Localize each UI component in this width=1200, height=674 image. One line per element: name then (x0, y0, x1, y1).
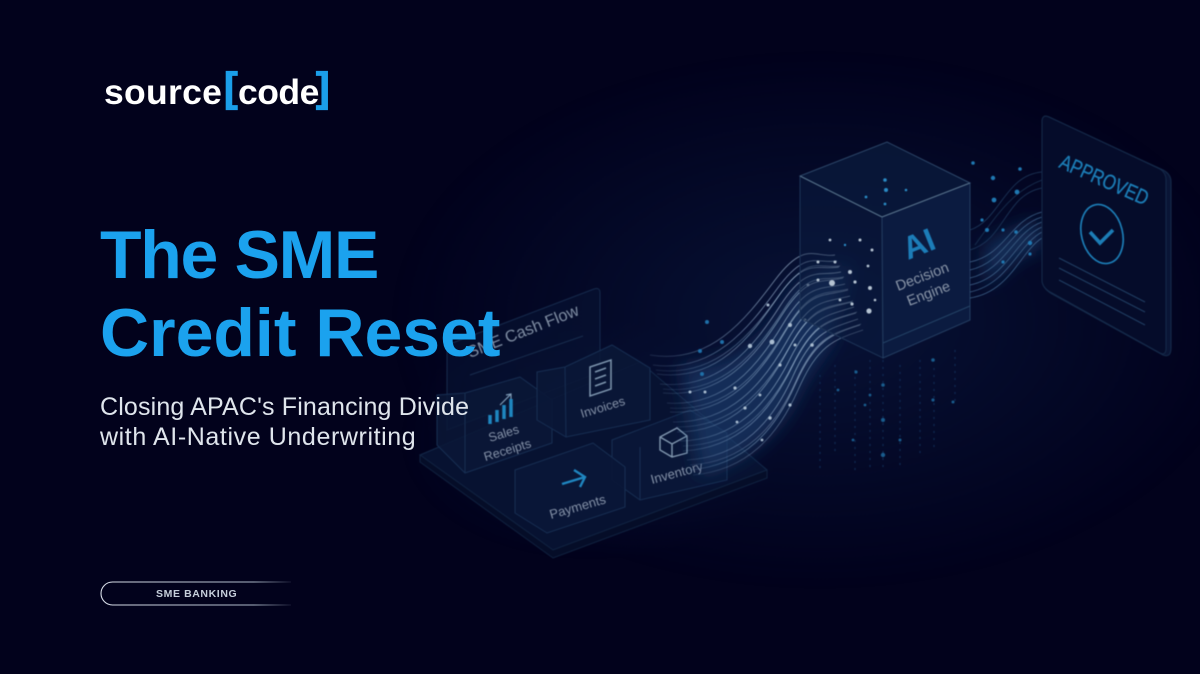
cube particles (816, 178, 907, 314)
card: Inventory (612, 410, 727, 500)
label: Decision Engine: Decision (894, 260, 951, 295)
subtitle: with AI-Native Underwriting (100, 423, 416, 451)
platform (420, 362, 767, 558)
tag: SME Banking: SME BANKING (156, 588, 237, 600)
icon: box (660, 428, 687, 457)
title (100, 217, 501, 371)
title: The SME (100, 217, 378, 293)
data stream: engine to approval (970, 172, 1042, 298)
label: Inventory: Inventory (649, 458, 705, 487)
label: AI: AI (897, 221, 940, 266)
stream particles (688, 284, 814, 441)
icon: check in circle (1075, 200, 1129, 268)
icon: arrow (562, 470, 585, 487)
logo: [ (224, 64, 238, 110)
label: Invoices: Invoices (579, 394, 627, 421)
logo: ] (316, 64, 330, 110)
label: Sales Receipts: Sales (487, 422, 521, 445)
subtitle: Closing APAC's Financing Divide (100, 393, 469, 421)
data stream: into the AI engine (650, 253, 863, 475)
data columns beneath the cube (820, 350, 955, 472)
label: Payments: Payments (548, 491, 608, 522)
panel: SME Cash Flow (447, 288, 600, 430)
logo: source (104, 72, 222, 112)
label: Sales Receipts: Receipts (482, 436, 533, 464)
stream particles: right (971, 161, 1032, 264)
icon: rising bar chart (490, 394, 511, 424)
label: Decision Engine: Engine (905, 279, 953, 310)
card: Invoices (537, 345, 650, 437)
logo (104, 64, 330, 112)
tag: SME Banking (100, 582, 291, 606)
card: Sales Receipts (437, 377, 552, 473)
cube: AI Decision Engine (800, 142, 970, 358)
text lines (1059, 258, 1145, 325)
label: APPROVED: APPROVED (1056, 151, 1152, 210)
panel: SME Cash Flow: SME Cash Flow (465, 302, 582, 362)
logo: code (238, 72, 319, 112)
title: Credit Reset (100, 295, 501, 371)
document: Approved (1042, 116, 1171, 356)
icon: document (590, 360, 611, 396)
card: Payments (515, 443, 625, 533)
subtitle (100, 393, 469, 451)
